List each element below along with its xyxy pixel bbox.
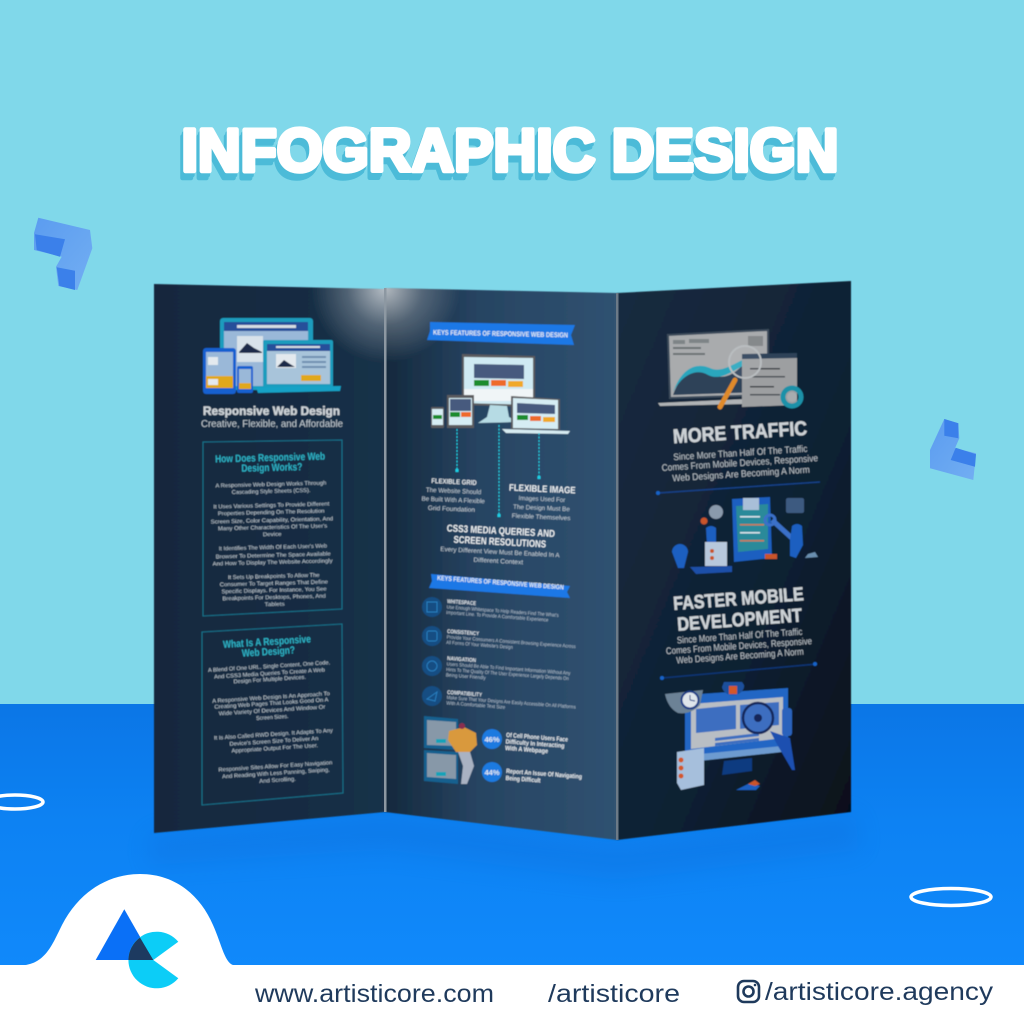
text block: what is a responsive web design: Wide Variety Of Devices And Window Or xyxy=(219,705,326,717)
text block: how does responsive web design work: It Uses Various Settings To Provide Different xyxy=(213,501,330,511)
text block: what is a responsive web design: Device's Screen Size To Deliver An xyxy=(229,736,319,748)
text block: what is a responsive web design: Design For Multiple Devices. xyxy=(233,675,307,685)
text block: how does responsive web design work: It Identifies The Width Of Each User's Web xyxy=(219,544,327,552)
left floor ring xyxy=(0,795,43,809)
text block: how does responsive web design work: Screen Size, Color Capability, Orientation, And xyxy=(211,516,333,526)
fold edge: left xyxy=(384,288,386,812)
icon: left 3D cube shape xyxy=(34,218,92,290)
box: what is responsive web design xyxy=(202,624,343,805)
title: INFOGRAPHIC DESIGN xyxy=(180,121,837,188)
title: INFOGRAPHIC DESIGN xyxy=(182,117,838,184)
heading: more traffic: MORE TRAFFIC xyxy=(672,418,808,448)
text block: what is a responsive web design: What Is A Responsive xyxy=(223,633,311,651)
text block: flexible grid: Be Built With A Flexible xyxy=(421,496,485,505)
text block: flexible grid: The Website Should xyxy=(426,487,482,496)
text block: css3 media queries xyxy=(440,523,562,568)
text block: what is a responsive web design: And CSS3 Media Queries To Create A Web xyxy=(214,667,325,681)
feature: compatibility: With A Comfortable Text Size xyxy=(446,700,506,711)
text block: flexible image: The Design Must Be xyxy=(513,504,570,513)
text block: how does responsive web design work: A Responsive Web Design Works Through xyxy=(215,481,326,489)
text block: more traffic description: Comes From Mobile Devices, Responsive xyxy=(661,453,818,474)
ribbon: keys features top: KEYS FEATURES OF RESPONSIVE WEB DESIGN xyxy=(433,330,568,339)
heading: faster mobile development: DEVELOPMENT xyxy=(677,605,803,636)
feature: whitespace: Important Line. To Provide A Comfortable Experience xyxy=(446,610,549,624)
icon: instagram xyxy=(738,981,759,1002)
heading: faster mobile development: FASTER MOBILE xyxy=(673,584,804,615)
stat: 44 percent xyxy=(482,762,582,788)
text block: faster mobile description: Since More Than Half Of The Traffic xyxy=(677,627,803,646)
icon: right 3D cube shape xyxy=(930,419,976,480)
feature: consistency: CONSISTENCY xyxy=(447,629,479,637)
text block: what is a responsive web design: A Blend Of One URL, Single Content, One Code, xyxy=(208,660,331,674)
text block: how does responsive web design work: It Sets Up Breakpoints To Allow The xyxy=(228,573,320,581)
heading: responsive web design: Responsive Web Design xyxy=(203,404,340,418)
panel: right benefits xyxy=(617,281,851,840)
text block: flexible image: FLEXIBLE IMAGE xyxy=(509,483,576,496)
panel: middle key features xyxy=(385,285,617,840)
panel shadow on floor xyxy=(150,815,860,880)
background sky xyxy=(0,0,1024,705)
text block: what is a responsive web design: Creating Web Pages That Looks Good On A xyxy=(214,697,329,711)
text block: flexible image: Flexible Themselves xyxy=(512,513,571,522)
footer bar xyxy=(0,965,1024,1024)
text block: flexible image: Images Used For xyxy=(518,495,566,504)
ribbon: keys features second: KEYS FEATURES OF RESPONSIVE WEB DESIGN xyxy=(437,575,564,592)
stat: 46 percent xyxy=(482,729,569,757)
subheading: Creative, Flexible, and Affordable xyxy=(201,418,343,430)
text block: how does responsive web design work: How Does Responsive Web xyxy=(215,451,325,465)
text block: css3 media queries: CSS3 MEDIA QUERIES AND xyxy=(446,523,555,540)
stat: 46 percent: With A Webpage xyxy=(505,745,549,755)
logo hill xyxy=(20,874,235,966)
title: INFOGRAPHIC DESIGN xyxy=(178,124,836,191)
social handle: /artisticore xyxy=(548,980,680,1008)
text block: what is a responsive web design: And Reading With Less Panning, Swiping, xyxy=(222,767,330,780)
text block: what is a responsive web design: It Is Also Called RWD Design. It Adapts To Any xyxy=(214,728,333,742)
text block: more traffic description xyxy=(661,443,819,485)
text block: what is a responsive web design: Screen Sizes. xyxy=(256,714,289,722)
icon: responsive screens xyxy=(431,354,570,434)
text block: what is a responsive web design xyxy=(206,632,338,788)
instagram handle: /artisticore.agency xyxy=(765,978,994,1006)
feature: navigation: Users Should Be Able To Find Important Information Without Any xyxy=(446,661,571,677)
divider line one xyxy=(656,482,820,495)
icon: responsive devices xyxy=(203,318,341,394)
panel: left responsive web design xyxy=(154,284,385,833)
text block: more traffic description: Web Designs Are Becoming A Norm xyxy=(672,465,810,484)
text block: what is a responsive web design: Appropriate Output For The User. xyxy=(231,743,319,755)
feature: consistency: Provide Your Consumers A Consistent Browsing Experience Across xyxy=(446,634,576,650)
text block: flexible grid: FLEXIBLE GRID xyxy=(431,478,477,487)
text block: css3 media queries: SCREEN RESOLUTIONS xyxy=(453,535,547,551)
feature: whitespace: WHITESPACE xyxy=(447,599,476,607)
text block: what is a responsive web design: A Responsive Web Design Is An Approach To xyxy=(212,691,330,705)
ribbon: keys features top xyxy=(427,322,575,345)
text block: css3 media queries: Every Different View Must Be Enabled In A xyxy=(440,546,560,559)
divider line two xyxy=(660,662,817,680)
glare on middle panel xyxy=(384,287,455,358)
feature: consistency xyxy=(422,626,577,656)
text block: how does responsive web design work: Device xyxy=(263,532,282,538)
text block: css3 media queries: Different Context xyxy=(473,557,524,566)
text block: how does responsive web design work: Design Works? xyxy=(241,461,303,475)
illustration: traffic chart xyxy=(658,330,801,407)
illustration: team building app xyxy=(672,497,818,574)
connector: flexible image xyxy=(538,433,540,479)
text block: how does responsive web design work: And How To Display The Website Accordingly xyxy=(213,558,333,568)
text block: flexible image xyxy=(508,483,576,522)
text block: how does responsive web design work: Many Other Characteristics Of The User's xyxy=(218,524,328,532)
text block: how does responsive web design work xyxy=(209,450,335,610)
text block: faster mobile description: Web Designs Are Becoming A Norm xyxy=(676,647,804,667)
text block: how does responsive web design work: Browser To Determine The Space Available xyxy=(216,551,331,560)
stat: 46 percent: 46% xyxy=(484,735,500,744)
stat: 44 percent: Report An Issue Of Navigating xyxy=(506,768,582,781)
text block: faster mobile description xyxy=(665,626,813,667)
fold edge: right xyxy=(616,293,618,840)
background floor xyxy=(0,704,1024,966)
heading: faster mobile development xyxy=(673,584,806,636)
text block: how does responsive web design work: Tablets xyxy=(265,602,285,608)
connector: css3 xyxy=(498,425,500,517)
stat: 46 percent: Difficulty In Interacting xyxy=(505,738,565,750)
feature: navigation: NAVIGATION xyxy=(447,656,476,664)
connector: flexible grid xyxy=(456,429,458,472)
right floor ring xyxy=(911,888,991,906)
text block: more traffic description: Since More Than Half Of The Traffic xyxy=(673,444,808,463)
illustration: monitor debugging xyxy=(665,682,795,790)
text block: what is a responsive web design: Web Design? xyxy=(242,644,295,660)
text block: how does responsive web design work: Cascading Style Sheets (CSS). xyxy=(232,488,311,496)
illustration: person with pages xyxy=(424,716,477,784)
text block: flexible grid xyxy=(421,478,486,514)
website link: www.artisticore.com xyxy=(254,980,494,1008)
feature: navigation xyxy=(422,656,571,688)
text block: what is a responsive web design: Responsive Sites Allow For Easy Navigation xyxy=(218,760,332,774)
feature: navigation: Being User Friendly xyxy=(446,672,486,681)
text block: how does responsive web design work: Properties Depending On The Resolution xyxy=(218,509,325,517)
feature: compatibility: Make Sure That Your Designs Are Easily Accessible On All Platforms xyxy=(446,695,576,711)
feature: whitespace xyxy=(422,597,560,624)
text block: flexible grid: Grid Foundation xyxy=(428,505,476,514)
text block: faster mobile description: Comes From Mobile Devices, Responsive xyxy=(666,636,812,657)
box: how does it work xyxy=(203,440,342,616)
text block: what is a responsive web design: And Scrolling. xyxy=(259,777,297,785)
feature: consistency: All Forms Of Your Website's Design xyxy=(446,640,513,651)
logo xyxy=(96,909,178,988)
glare on left panel xyxy=(317,287,384,358)
stat: 46 percent: Of Cell Phone Users Face xyxy=(506,732,569,744)
feature: navigation: Hints To The Quality Of The User Experience Largely Depends On xyxy=(446,667,569,682)
text block: how does responsive web design work: Breakpoints For Desktops, Phones, And xyxy=(222,594,326,602)
feature: compatibility: COMPATIBILITY xyxy=(447,690,482,699)
feature: whitespace: Use Enough Whitespace To Help Readers Find The What's xyxy=(446,604,559,619)
stat: 44 percent: 44% xyxy=(484,768,500,777)
text block: how does responsive web design work: Specific Displays. For Instance, You See xyxy=(222,587,327,595)
ribbon: keys features second xyxy=(429,574,570,598)
stat: 44 percent: Being Difficult xyxy=(505,775,541,785)
text block: how does responsive web design work: Consumer To Target Ranges That Define xyxy=(220,580,328,588)
feature: compatibility xyxy=(422,686,577,716)
